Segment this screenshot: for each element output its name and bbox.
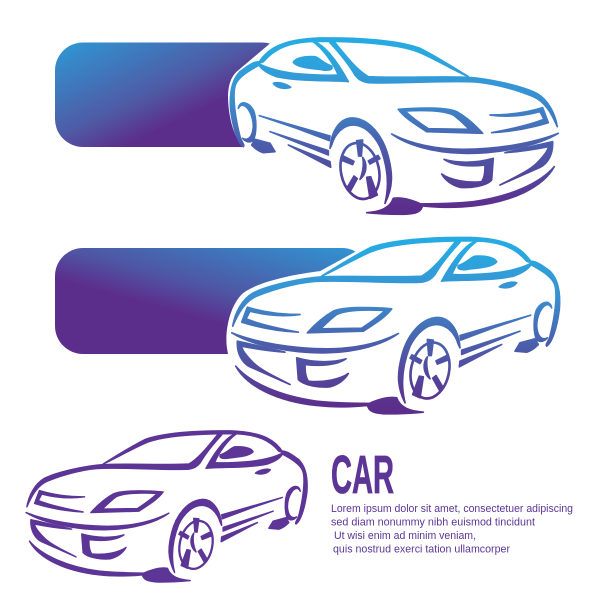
car: middle illustration, facing left — [226, 234, 562, 418]
car: bottom solid purple illustration — [26, 431, 307, 582]
text block: lorem ipsum description: Lorem ipsum dolor sit amet, consectetuer adipiscing — [331, 503, 573, 515]
banner: middle gradient panel — [55, 248, 370, 354]
heading: CAR: CAR — [331, 445, 394, 505]
banner: top gradient panel — [55, 42, 290, 147]
text block: lorem ipsum description — [331, 503, 573, 556]
text block: lorem ipsum description: quis nostrud exerci tation ullamcorper — [333, 544, 510, 556]
text block: lorem ipsum description: Ut wisi enim ad minim veniam, — [334, 530, 476, 542]
text block: lorem ipsum description: sed diam nonummy nibh euismod tincidunt — [331, 516, 535, 528]
car: top illustration, facing right — [228, 35, 564, 218]
